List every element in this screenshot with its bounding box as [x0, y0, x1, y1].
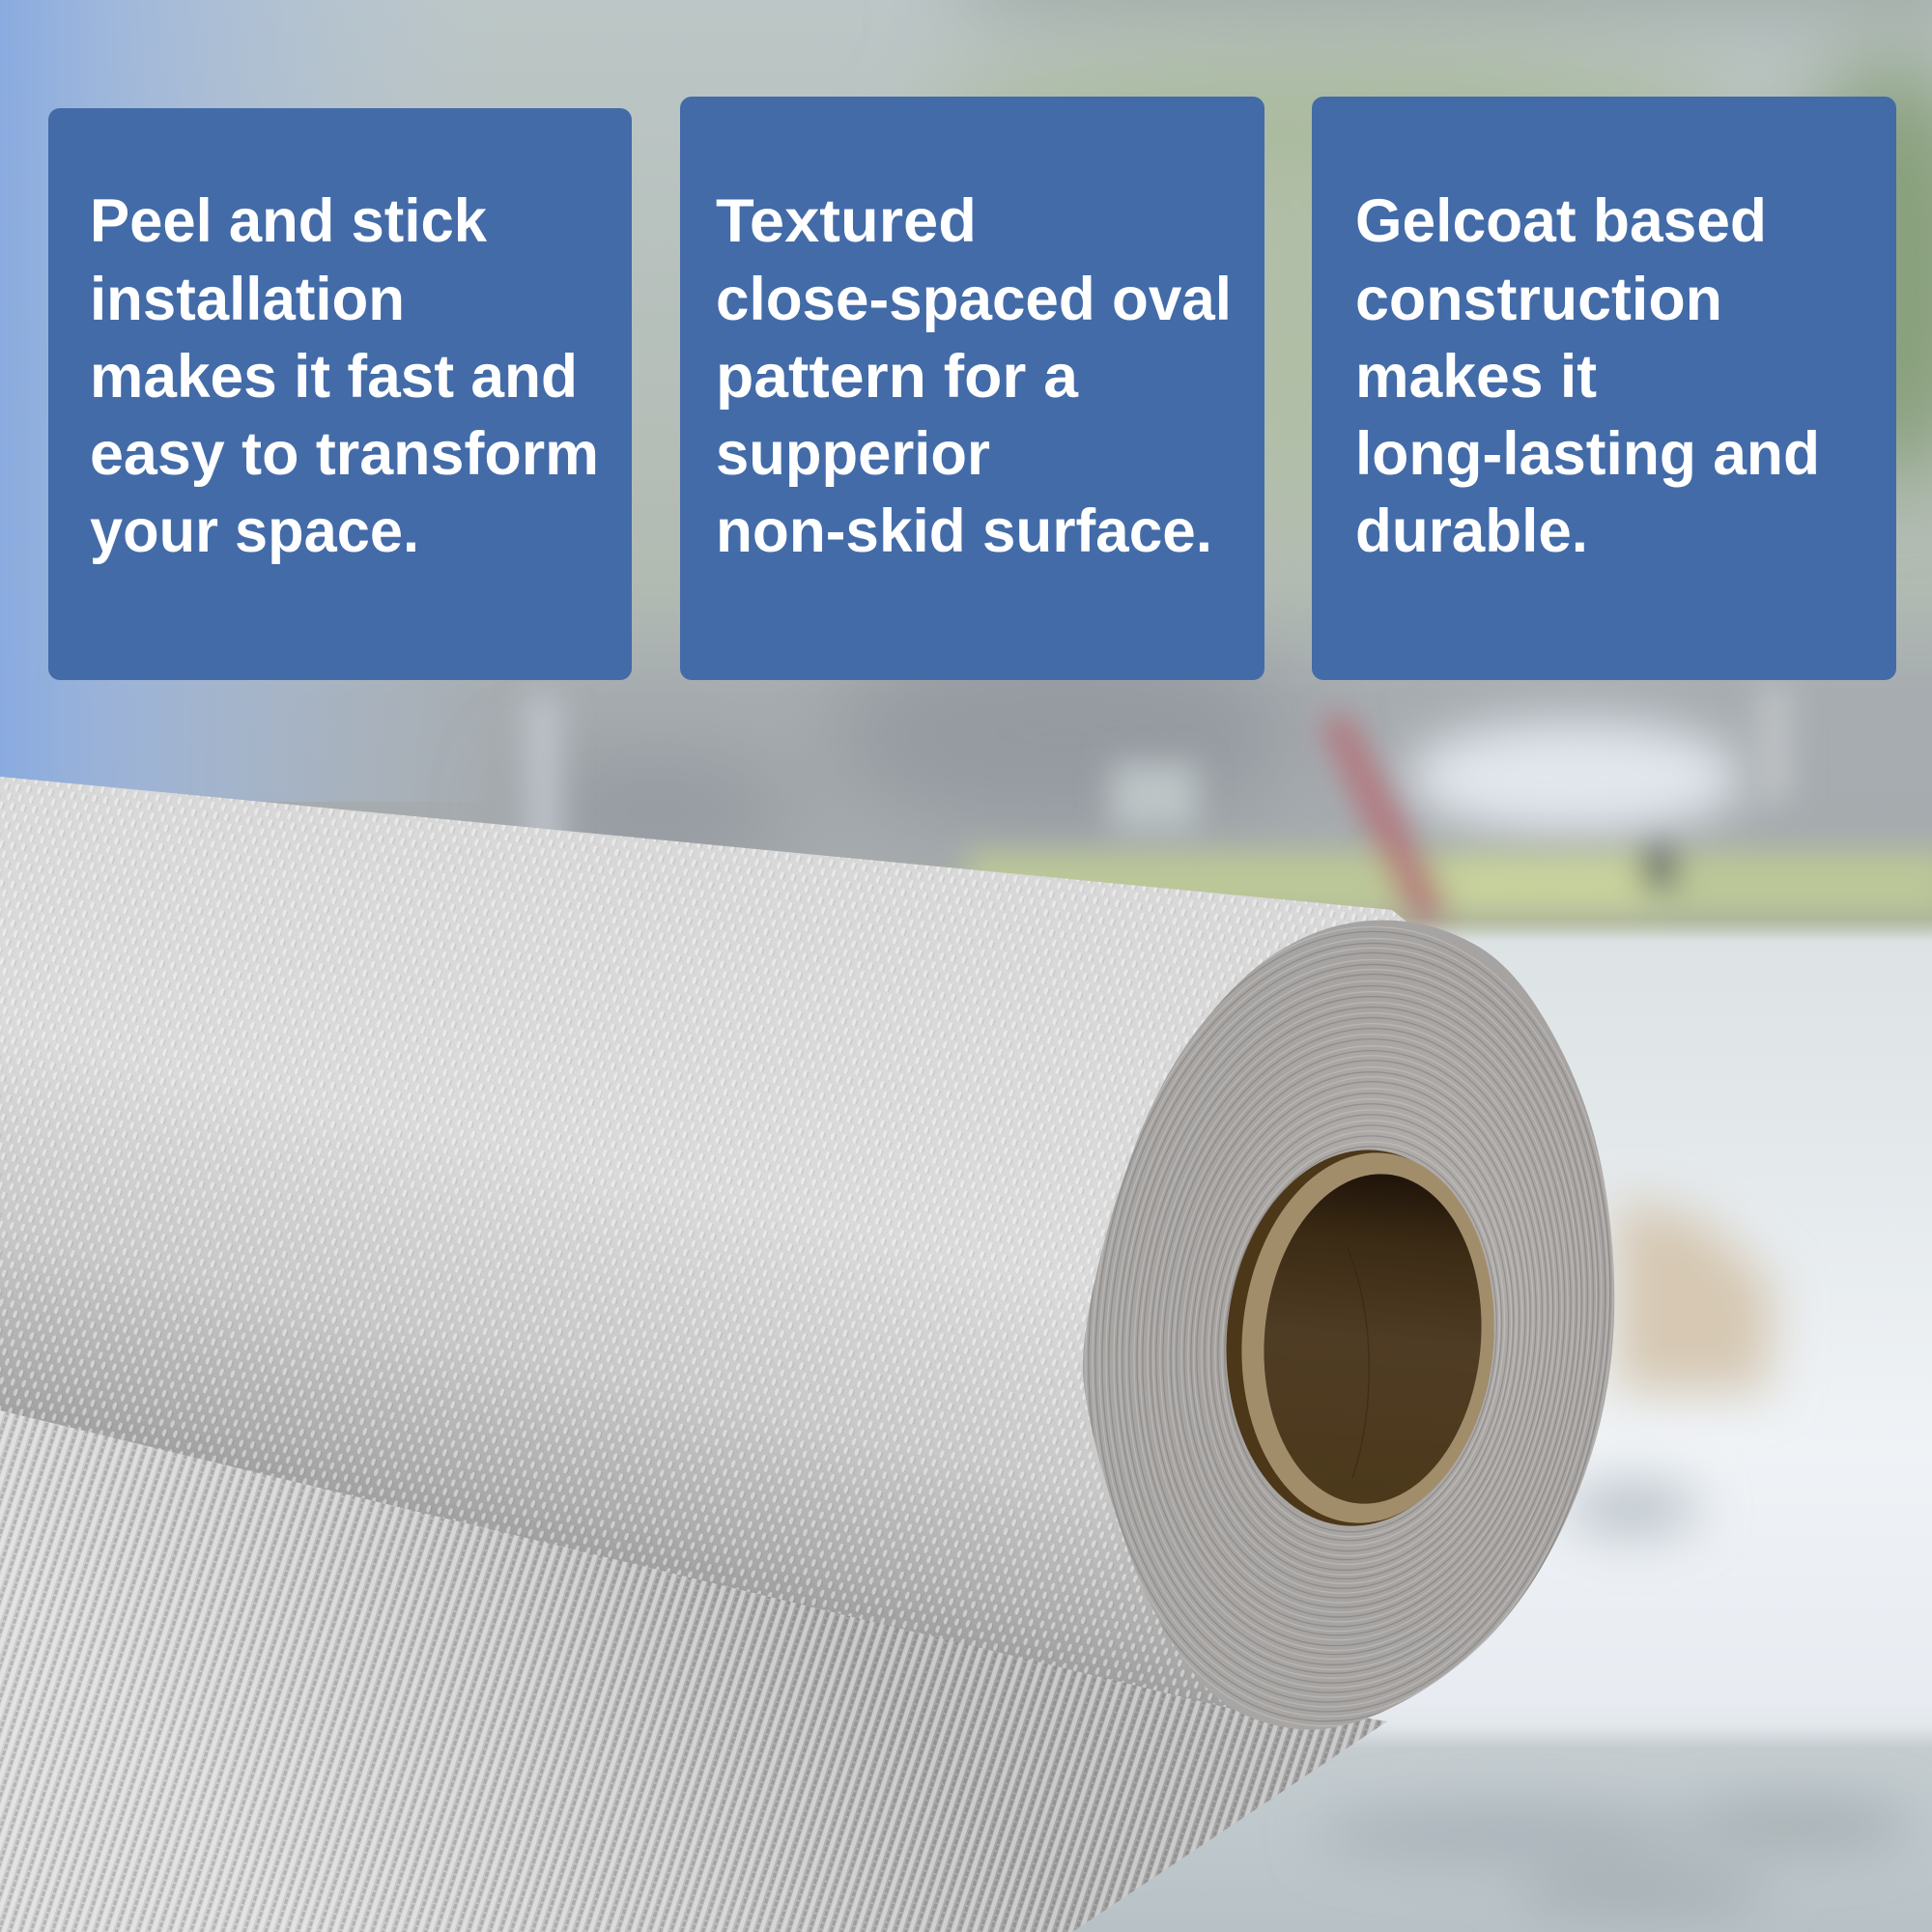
text: peel and stick: easy to transform: [90, 420, 599, 488]
text: gelcoat construction: [1355, 187, 1820, 565]
text: textured pattern: pattern for a: [716, 343, 1079, 411]
text: peel and stick: installation: [90, 266, 405, 333]
text: gelcoat construction: long-lasting and: [1355, 420, 1820, 488]
panel: peel and stick: [48, 108, 632, 680]
text: gelcoat construction: durable.: [1355, 497, 1588, 565]
text: textured pattern: supperior: [716, 420, 990, 488]
text: textured pattern: close-spaced oval: [716, 266, 1232, 333]
text: peel and stick: your space.: [90, 497, 419, 565]
text: textured pattern: [716, 187, 1232, 565]
text: textured pattern: Textured: [716, 187, 977, 255]
text: peel and stick: [90, 187, 599, 565]
text: peel and stick: Peel and stick: [90, 187, 488, 255]
text: peel and stick: makes it fast and: [90, 343, 578, 411]
text: gelcoat construction: makes it: [1355, 343, 1597, 411]
roll end with spiral layers: [1082, 920, 1615, 1729]
text: gelcoat construction: Gelcoat based: [1355, 187, 1767, 255]
panel: gelcoat construction: [1312, 97, 1896, 680]
cardboard core: [1211, 1139, 1509, 1537]
text: textured pattern: non-skid surface.: [716, 497, 1212, 565]
panel: textured pattern: [680, 97, 1264, 680]
roll body: [0, 777, 1420, 1715]
text: gelcoat construction: construction: [1355, 266, 1722, 333]
flat sheet unrolled below the roll: [0, 1410, 1387, 1932]
